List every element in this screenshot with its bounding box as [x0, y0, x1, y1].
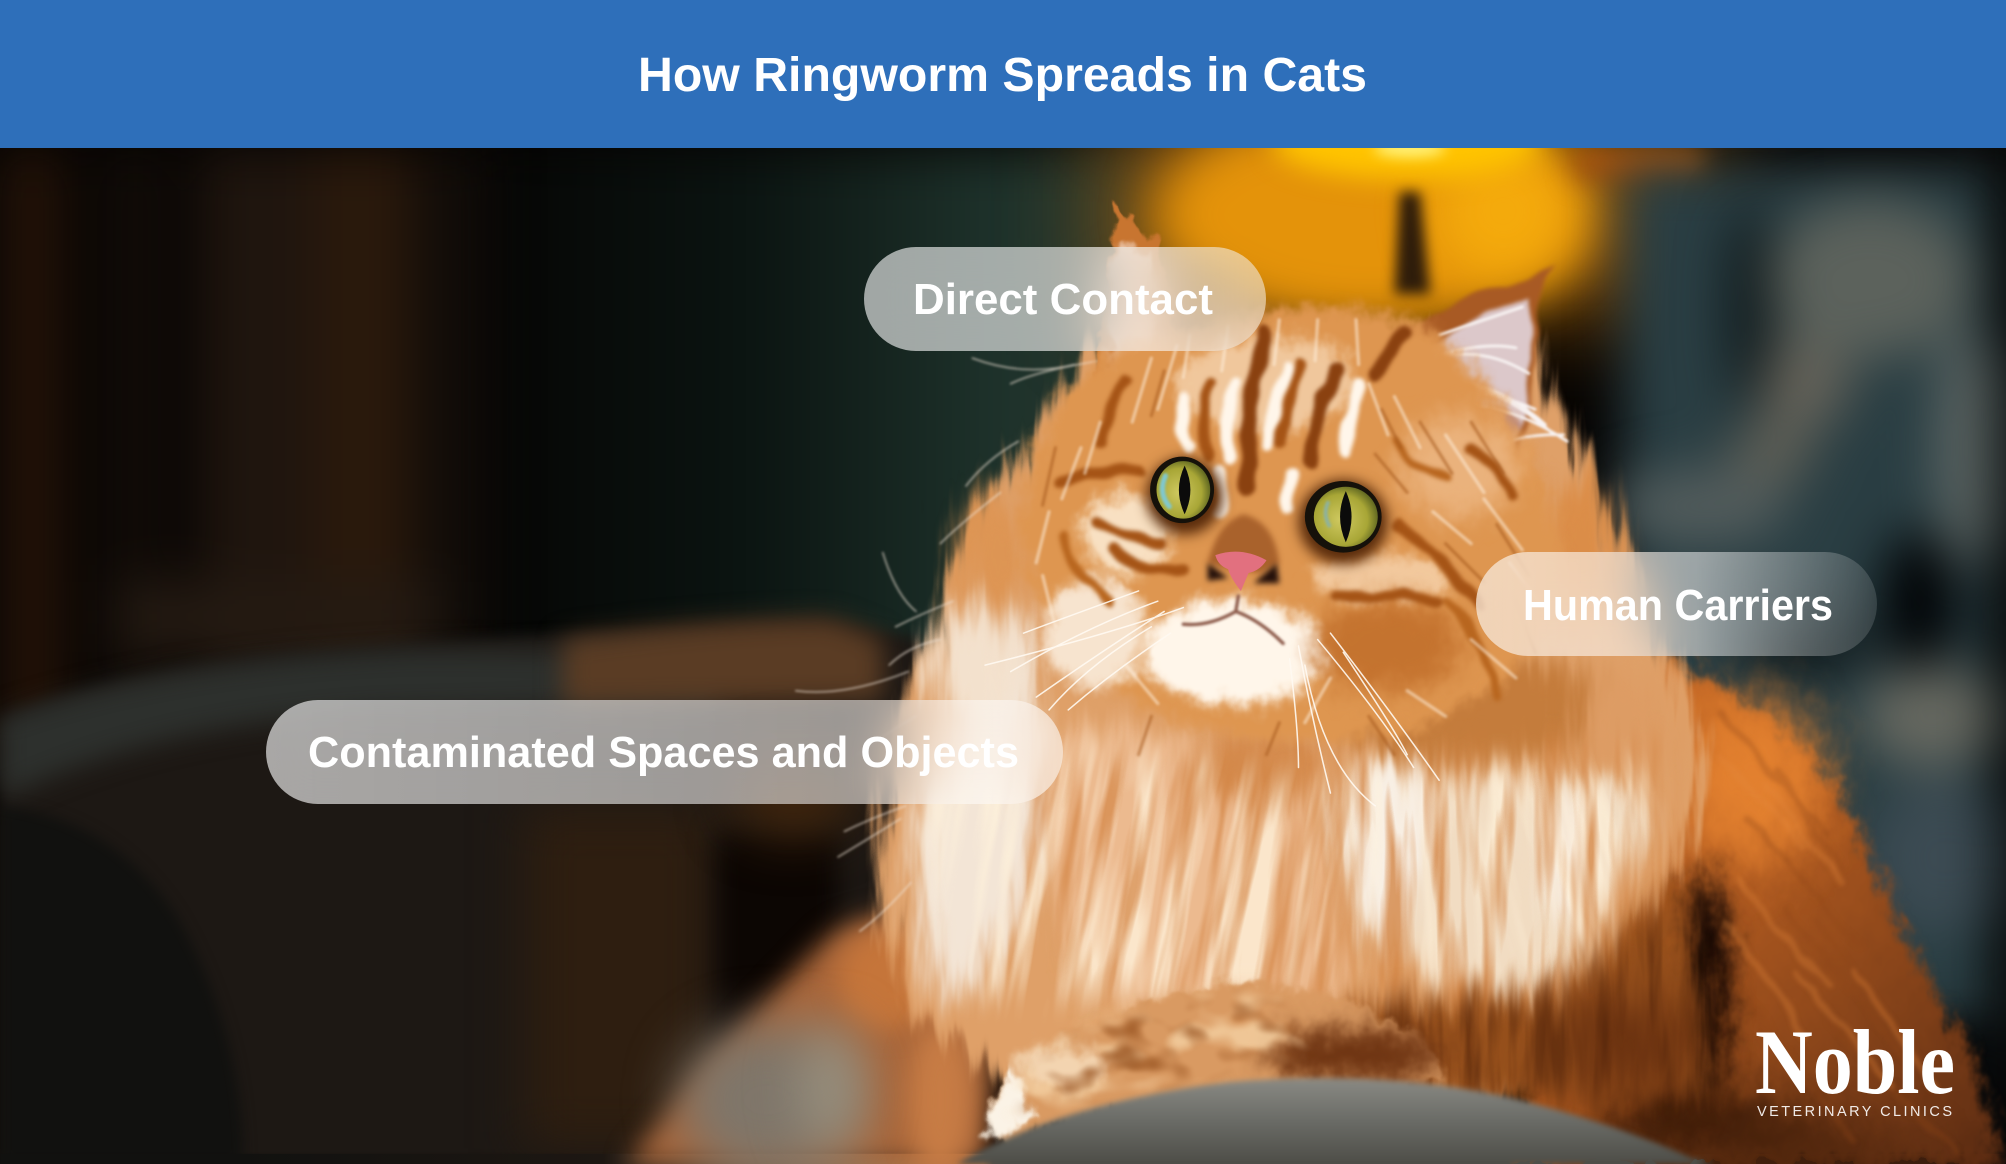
- cat: cream left ruff: [912, 601, 1047, 1011]
- cat: whiskers: [985, 591, 1439, 806]
- cat: neck ruff: [1330, 656, 1612, 764]
- cat: head: [985, 202, 1567, 806]
- logo: Noble Veterinary Clinics: Noble: [1755, 1011, 1955, 1113]
- background: table lamp glow: [1113, 102, 1701, 327]
- pill: human carriers: [1476, 552, 1877, 656]
- cat: blurred tail in foreground: [627, 915, 998, 1164]
- cat: lit cream chest: [1343, 774, 1650, 989]
- cat: fine facial fur: [1036, 320, 1548, 755]
- cat: right eye: [1305, 481, 1382, 553]
- bottom edge base colours: [0, 1154, 2006, 1164]
- header band: [0, 0, 2006, 148]
- background: grey-teal armchair on the right: [1614, 148, 2006, 1164]
- cat: nose bridge: [1208, 514, 1279, 573]
- pill: direct contact: Direct Contact: [913, 275, 1213, 324]
- cat: left ear: [1094, 202, 1183, 384]
- cat: back fur strands: [1721, 716, 1957, 1151]
- cat: face base: [1020, 307, 1562, 740]
- pill: contaminated spaces and objects: [266, 700, 1063, 804]
- background: dark sofa on the left: [0, 619, 972, 1164]
- title: How Ringworm Spreads in Cats: [638, 49, 1367, 102]
- pill: direct contact: [864, 247, 1266, 351]
- cat: right ear: [1369, 263, 1567, 458]
- cat: orange back fur: [1510, 652, 2002, 1164]
- cat: mouth: [1183, 596, 1283, 643]
- cat: nose: [1208, 552, 1279, 591]
- cat: facial stripes: [1062, 335, 1512, 697]
- pill: human carriers: Human Carriers: [1523, 581, 1833, 630]
- pill: contaminated spaces and objects: Contaminated Spaces and Objects: [308, 728, 1019, 777]
- cat: chest fur strands: [1343, 767, 1535, 985]
- cat: peach centre chest: [1049, 729, 1356, 1007]
- cat: eye shadows: [1146, 458, 1388, 564]
- cat: fur wisps on left edge: [796, 358, 1100, 931]
- cat: lower sofa cushion under paw: [957, 1078, 1704, 1164]
- cat: brown shadow below mane: [1318, 883, 1708, 1106]
- cat: main body and mane: [796, 335, 1713, 1126]
- cat: white chest strands: [1350, 757, 1426, 931]
- cat: front paw: [988, 982, 1446, 1145]
- cat: left eye: [1150, 457, 1214, 523]
- logo: Noble Veterinary Clinics: VETERINARY CLINICS: [1757, 1104, 1952, 1120]
